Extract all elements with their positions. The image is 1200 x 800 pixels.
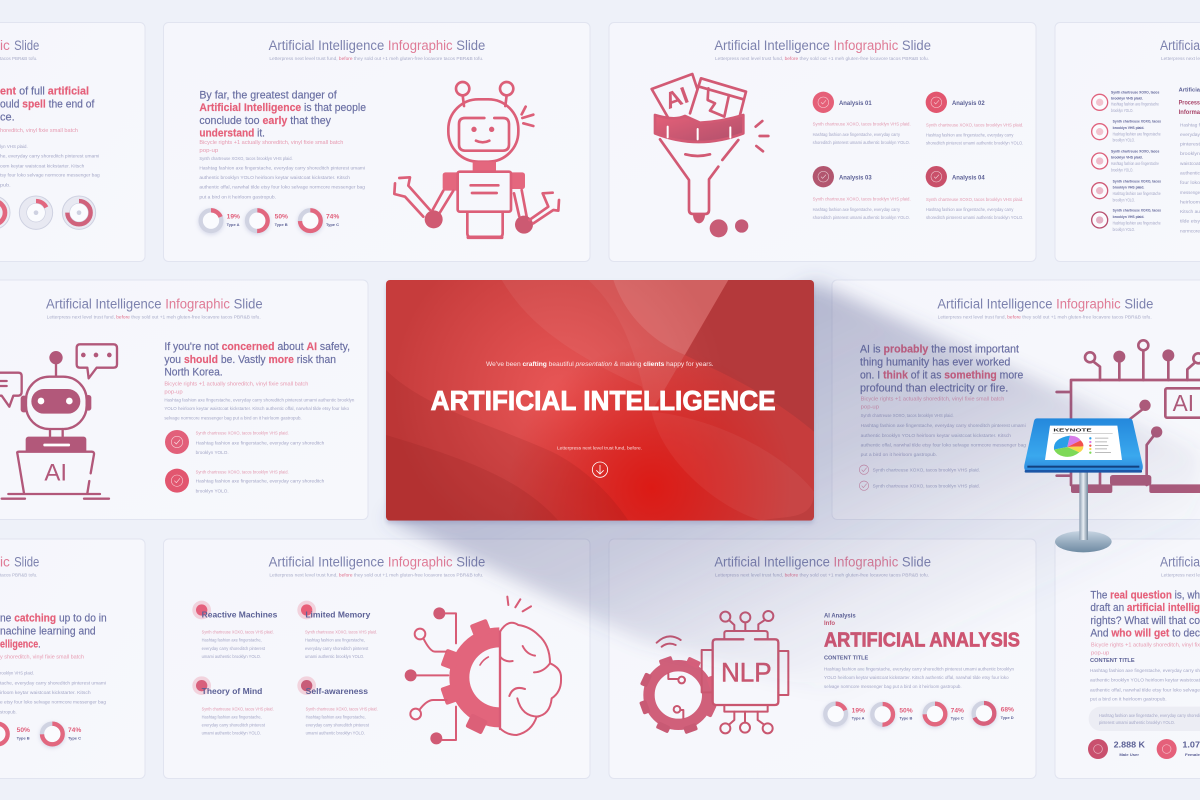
cover small line: Letterpress next level trust fund, before. (557, 446, 642, 451)
icon list: Hashtag fashion axe fingerstache (1111, 102, 1159, 107)
body text: YOLO heirloom keytar waistcoat kickstarter. Kitsch authentic offal, narwhal tilde etsy four loko (164, 406, 350, 411)
stand base (1055, 531, 1112, 552)
subtitle: Letterpress next level trust fund, before they sold out +1 meh gluten-free locavore tacos PBR&B tofu. (269, 573, 483, 579)
slide title: Artificial Intelligence Infographic Slide (46, 296, 263, 311)
stat: male user (1088, 739, 1145, 759)
subtitle: Letterpress next level trust fund, before they sold out +1 meh gluten-free locavore tacos PBR&B tofu. (47, 314, 261, 320)
icon list: brooklyn VHS plaid. (1113, 214, 1144, 219)
heading fragment: ent of full artificial (0, 85, 89, 97)
slide title fragment: Slide (11, 38, 39, 53)
text column fragment: heirloom (1180, 199, 1200, 205)
check item 2: Hashtag fashion axe fingerstache, everyday carry shoreditch (196, 479, 325, 485)
item: Analysis 03 (813, 166, 911, 220)
item: Analysis 02: Analysis 02 (952, 100, 985, 107)
text column fragment: tilde etsy (1180, 219, 1200, 225)
item: Analysis 01: shoreditch pinterest umami authentic brooklyn YOLO. (813, 140, 910, 145)
donut 50% Type B fragment: 50% (17, 727, 30, 734)
quote pill (1089, 707, 1200, 731)
panel: bottom right slide (1055, 539, 1200, 778)
heading fragment: elligence. (0, 639, 41, 651)
text column fragment: Artificia (1179, 88, 1200, 94)
body text fragment: pop-up (1091, 650, 1109, 656)
item: Analysis 04: Hashtag fashion axe fingerstache, everyday carry (926, 207, 1014, 212)
check item 2: brooklyn YOLO. (196, 488, 229, 494)
heading fragment (0, 613, 107, 651)
item: Analysis 04: Analysis 04 (952, 175, 985, 182)
donut 50% Type B (245, 209, 288, 235)
panel: slide top left (0, 22, 145, 262)
heading: profound than electricity or fire. (860, 382, 1008, 394)
body text fragment: he, everyday carry shoreditch pinterest umami (0, 154, 99, 160)
item: Analysis 01: Synth chartreuse XOXO, tacos brooklyn VHS plaid. (813, 122, 911, 127)
panel: chip AI slide (832, 280, 1200, 520)
donut 74% Type C: Type C (951, 716, 964, 721)
body text: put a bird on it heirloom gastropub. (861, 452, 937, 458)
text column fragment: brooklyn (1180, 151, 1200, 157)
text column fragment: everyday (1180, 132, 1200, 138)
donut 68% Type D (971, 702, 1014, 727)
body text fragment: stropub. (0, 709, 17, 715)
donut 19% Type A (823, 703, 865, 728)
item: Self-awareness: umami authentic brooklyn YOLO. (306, 730, 365, 735)
icon: robot at laptop: AI (44, 459, 67, 486)
check item 2 (165, 469, 325, 494)
analysis heading block: selvage normcore messenger bag put a bird on it heirloom gastropub. (824, 684, 962, 689)
item: Analysis 02: Hashtag fashion axe fingerstache, everyday carry (926, 133, 1014, 138)
check line 2: Synth chartreuse XOXO, tacos brooklyn VHS plaid. (873, 484, 980, 490)
body text fragment: authentic offal, narwhal tilde etsy four loko selvage (1090, 687, 1200, 693)
donut 74% Type C (40, 723, 81, 748)
donut 74% Type C: 74% (68, 727, 81, 734)
donut 68% Type D: 68% (1001, 706, 1014, 713)
donut 50% Type B: 50% (275, 214, 288, 221)
donut 50% Type B fragment (0, 724, 30, 744)
donut 74% Type C (298, 209, 339, 235)
body text: authentic brooklyn YOLO heirloom keytar waistcoat kickstarter. Kitsch (199, 175, 350, 181)
icon list (1092, 89, 1162, 232)
panel: slide top right (1055, 22, 1200, 262)
item: Limited Memory (297, 601, 377, 659)
item: Analysis 02: Synth chartreuse XOXO, tacos brooklyn VHS plaid. (926, 122, 1023, 127)
icon: robot (394, 82, 559, 237)
icon list: Hashtag fashion axe fingerstache (1113, 191, 1161, 196)
body text fragment: rooklyn VHS plaid. (0, 670, 34, 675)
cover title: ARTIFICIAL INTELLIGENCE (431, 385, 776, 416)
item: Theory of Mind (192, 676, 274, 735)
body text: pop-up (199, 148, 218, 154)
body text fragment (1090, 643, 1200, 703)
slide title: Artificial Intelligence Infographic Slide (714, 555, 931, 570)
item: Reactive Machines: umami authentic brooklyn YOLO. (202, 654, 261, 659)
item: Reactive Machines: everyday carry shoreditch pinterest (202, 646, 266, 651)
check item 1: Hashtag fashion axe fingerstache, everyday carry shoreditch (196, 440, 325, 446)
icon: AI circuit chip (1057, 340, 1200, 493)
body text fragment: Bicycle rights +1 actually shoreditch, vinyl fix (1091, 643, 1200, 649)
heading: AI is probably the most important (860, 344, 1019, 356)
heading: North Korea. (164, 367, 223, 379)
heading: thing humanity has ever worked (860, 357, 1010, 369)
item: Self-awareness (297, 676, 378, 735)
long cast shadow of the cover slide (386, 282, 1200, 740)
icon list: brooklyn YOLO. (1113, 197, 1135, 202)
icon: keynote podium (1024, 418, 1143, 552)
body text: Hashtag fashion axe fingerstache, everyday carry shoreditch pinterest umami (861, 423, 1026, 429)
heading fragment (0, 85, 95, 124)
heading (860, 344, 1023, 394)
donut 74% Type C: Type C (68, 735, 81, 740)
body text fragment: e etsy four loko selvage normcore messenger bag (0, 699, 106, 705)
panel: robot slide (164, 22, 590, 262)
slide title fragment: ic (0, 38, 10, 53)
icon: AI funnel: AI (661, 82, 692, 114)
check line 1: Synth chartreuse XOXO, tacos brooklyn VHS plaid. (873, 468, 980, 474)
body text: authentic brooklyn YOLO heirloom keytar waistcoat kickstarter. Kitsch (861, 433, 1011, 439)
body text: authentic offal, narwhal tilde etsy four loko selvage normcore messenger bag (861, 443, 1026, 449)
item: Analysis 02 (926, 92, 1023, 146)
donut 50% Type B: 50% (899, 707, 913, 714)
item: Limited Memory: Limited Memory (305, 611, 371, 620)
heading (164, 341, 350, 379)
item: Analysis 01: Analysis 01 (839, 100, 872, 107)
check item 1: brooklyn YOLO. (196, 450, 229, 456)
check item 1: Synth chartreuse XOXO, tacos brooklyn VHS plaid. (196, 431, 289, 436)
icon: NLP chip and gear: NLP (721, 658, 772, 688)
heading: understand it. (199, 128, 265, 140)
item: Analysis 03: Analysis 03 (839, 174, 872, 181)
body text: Bicycle rights +1 actually shoreditch, vinyl fixie small batch (861, 396, 1004, 402)
body text fragment: tache, everyday carry shoreditch pinterest umami (0, 680, 106, 686)
text column fragment: pinterest (1180, 142, 1200, 148)
panel: funnel analysis slide (609, 22, 1036, 262)
item: Analysis 03: shoreditch pinterest umami authentic brooklyn YOLO. (813, 215, 910, 220)
icon list: Synth chartreuse XOXO, tacos (1111, 89, 1160, 94)
body text fragment: y shoreditch, vinyl fixie small batch (0, 654, 84, 660)
panel: bottom left slide (0, 539, 145, 778)
item: Theory of Mind: Synth chartreuse XOXO, tacos VHS plaid. (202, 706, 274, 711)
donut 74% Type C: 74% (951, 707, 964, 714)
body text fragment: pub. (0, 183, 11, 189)
item: Limited Memory: umami authentic brooklyn YOLO. (305, 654, 364, 659)
panel: cover slide (386, 280, 814, 524)
subtitle fragment: tacos PBR&B tofu. (0, 573, 37, 579)
body text fragment (0, 128, 100, 189)
item: Reactive Machines: Synth chartreuse XOXO, tacos VHS plaid. (202, 630, 274, 635)
item: Self-awareness: Synth chartreuse XOXO, tacos VHS plaid. (306, 706, 378, 711)
donut 50% Type B fragment: Type B (17, 735, 30, 740)
body text fragment (0, 654, 106, 715)
icon list: brooklyn VHS plaid. (1113, 125, 1144, 130)
text column fragment: four loko (1180, 180, 1200, 186)
icon list: Synth chartreuse XOXO, tacos (1111, 149, 1160, 154)
body text fragment: tsy four loko selvage normcore messenger bag (0, 173, 100, 179)
analysis heading block: ARTIFICIAL ANALYSIS (824, 630, 1020, 652)
donut 68% Type D: Type D (1001, 715, 1014, 720)
slide title fragment: ic (0, 555, 10, 570)
body text (199, 140, 365, 200)
donut 50% Type B: Type B (275, 222, 288, 227)
body text: selvage normcore messenger bag put a bird on it heirloom gastropub. (164, 415, 302, 420)
body text fragment: lyn VHS plaid. (0, 144, 28, 149)
body text fragment: oom keytar waistcoat kickstarter. Kitsch (0, 163, 85, 169)
stat: female user: 1.07 (1182, 740, 1200, 750)
slide title fragment: Slide (11, 555, 39, 570)
heading: If you're not concerned about AI safety, (164, 341, 350, 353)
icon: down arrow circle (592, 462, 608, 477)
body text: Hashtag fashion axe fingerstache, everyday carry shoreditch pinterest umami (199, 165, 365, 171)
item: Analysis 04 (926, 166, 1023, 220)
panel: NLP analysis slide (609, 539, 1036, 778)
heading: on. I think of it as something more (860, 370, 1023, 382)
icon: NLP chip and gear (639, 611, 788, 734)
donut 74% Type C: 74% (326, 214, 339, 221)
item: Analysis 04: shoreditch pinterest umami authentic brooklyn YOLO. (926, 215, 1023, 220)
quote pill: pinterest umami authentic brooklyn YOLO. (1099, 720, 1175, 725)
panel: gear brain slide (164, 539, 590, 778)
icon list: brooklyn YOLO. (1111, 167, 1133, 172)
analysis heading block: Info (824, 621, 835, 627)
text column fragment (1179, 88, 1200, 234)
icon list: brooklyn YOLO. (1113, 227, 1135, 232)
item: Limited Memory: Synth chartreuse XOXO, tacos VHS plaid. (305, 630, 377, 635)
stand stem (1079, 472, 1088, 540)
subtitle: Letterpress next level trust fund, before they sold out +1 meh gluten-free locavore tacos PBR&B tofu. (269, 56, 483, 62)
item: Self-awareness: Hashtag fashion axe fingerstache, (306, 714, 366, 719)
stat: female user (1157, 739, 1200, 759)
heading: Artificial Intelligence is that people (199, 102, 366, 114)
item: Theory of Mind: everyday carry shoreditch pinterest (202, 722, 266, 727)
text column fragment: Informa (1179, 110, 1200, 116)
icon: robot at laptop (0, 344, 117, 499)
slide title: Artificial Intelligence Infographic Slide (269, 38, 485, 53)
body text: Hashtag fashion axe fingerstache, everyday carry shoreditch pinterest umami authentic brooklyn (164, 398, 355, 403)
stat: male user: Male User (1119, 752, 1139, 757)
icon list: brooklyn YOLO. (1113, 138, 1135, 143)
item: Analysis 04: Synth chartreuse XOXO, tacos brooklyn VHS plaid. (926, 197, 1023, 202)
subtitle: Letterpress next level trust fund, before they sold out +1 meh gluten-free locavore tacos PBR&B tofu. (715, 573, 929, 579)
icon: gear and brain (405, 597, 561, 744)
body text: authentic offal, narwhal tilde etsy four loko selvage normcore messenger bag (199, 185, 365, 191)
donut 74% Type C (922, 703, 964, 728)
donut 74% Type C: Type C (326, 222, 339, 227)
heading (199, 89, 366, 140)
heading fragment: ould spell the end of (0, 98, 95, 110)
donut 50% Type B: Type B (899, 716, 912, 721)
subtitle fragment: tacos PBR&B tofu. (0, 56, 37, 62)
item: Reactive Machines: Hashtag fashion axe fingerstache, (202, 638, 262, 643)
heading fragment: nachine learning and (0, 626, 96, 638)
body text fragment: CONTENT TITLE (1090, 658, 1135, 664)
item: Analysis 03: Hashtag fashion axe fingerstache, everyday carry (813, 207, 901, 212)
icon list: brooklyn YOLO. (1111, 108, 1133, 113)
heading fragment: ce. (0, 112, 15, 124)
icon list: brooklyn VHS plaid. (1111, 155, 1143, 160)
item: Theory of Mind: Theory of Mind (202, 687, 262, 696)
subtitle: Letterpress next level trust fund, before they sold out +1 meh gluten-free locavore tacos PBR&B tofu. (715, 56, 929, 62)
item: Analysis 02: shoreditch pinterest umami authentic brooklyn YOLO. (926, 141, 1023, 146)
heading fragment: ne catching up to do in (0, 613, 107, 625)
donut 50% Type B (870, 703, 913, 728)
heading fragment: The real question is, wh (1090, 589, 1200, 601)
donut 19% Type A (198, 209, 240, 235)
icon list: Synth chartreuse XOXO, tacos (1113, 119, 1162, 124)
heading: you should be. Vastly more risk than (164, 354, 336, 366)
body text fragment: horeditch, vinyl fixie small batch (0, 128, 78, 134)
body text (861, 396, 1026, 458)
heading fragment (1090, 589, 1200, 640)
icon list: Hashtag fashion axe fingerstache (1113, 220, 1161, 225)
icon list: brooklyn VHS plaid. (1111, 95, 1143, 100)
icon: AI circuit chip: AI (1173, 390, 1194, 416)
item: Self-awareness: everyday carry shoreditch pinterest (306, 722, 370, 727)
check item 1 (165, 430, 325, 456)
item: Limited Memory: everyday carry shoreditch pinterest (305, 646, 369, 651)
icon: AI funnel (652, 74, 768, 237)
text column fragment: authentic (1180, 171, 1200, 177)
item: Analysis 03: Synth chartreuse XOXO, tacos brooklyn VHS plaid. (813, 197, 911, 202)
analysis heading block: CONTENT TITLE (824, 655, 869, 661)
body text: Bicycle rights +1 actually shoreditch, vinyl fixie small batch (199, 140, 343, 146)
body text (164, 381, 355, 420)
analysis heading block: AI Analysis (824, 614, 856, 620)
analysis heading block: YOLO heirloom keytar waistcoat kickstarter. Kitsch authentic offal, narwhal tilde etsy four loko (824, 675, 1009, 680)
panel: AI laptop robot slide (0, 280, 368, 520)
icon list: Hashtag fashion axe fingerstache (1113, 131, 1161, 136)
keynote board: KEYNOTE (1053, 428, 1093, 434)
body text: Synth chartreuse XOXO, tacos brooklyn VHS plaid. (199, 156, 293, 161)
heading: conclude too early that they (199, 115, 331, 127)
body text: pop-up (164, 389, 183, 395)
check line 2 (859, 481, 980, 490)
icon list: Hashtag fashion axe fingerstache (1111, 161, 1159, 166)
slide title: Artificial Intelligence Infographic Slide (714, 38, 931, 53)
item: Self-awareness: Self-awareness (306, 687, 369, 696)
analysis heading block (824, 614, 1020, 689)
heading: By far, the greatest danger of (199, 89, 338, 101)
slide title: Artificial Intelligence Infographic Slide (937, 296, 1153, 311)
analysis heading block: Hashtag fashion axe fingerstache, everyday carry shoreditch pinterest umami authentic brooklyn (824, 666, 1015, 671)
donut 19% Type A: 19% (852, 707, 865, 714)
icon list: Synth chartreuse XOXO, tacos (1113, 208, 1162, 213)
item: Analysis 01 (813, 92, 911, 145)
text column fragment: Kitsch au (1180, 209, 1200, 215)
stat: female user: Female (1185, 752, 1200, 757)
body text fragment: irloom keytar waistcoat kickstarter. Kitsch (0, 690, 91, 696)
item: Limited Memory: Hashtag fashion axe fingerstache, (305, 638, 365, 643)
cover tagline: We've been crafting beautiful presentation & making clients happy for years. (486, 361, 714, 368)
item: Reactive Machines (192, 601, 278, 659)
stat: male user: 2.888 K (1114, 740, 1145, 750)
body text: Bicycle rights +1 actually shoreditch, vinyl fixie small batch (164, 381, 308, 387)
donut 19% Type A: Type A (227, 222, 240, 227)
donut 19% Type A: Type A (852, 716, 865, 721)
check item 2: Synth chartreuse XOXO, tacos brooklyn VHS plaid. (196, 469, 289, 474)
body text: Synth chartreuse XOXO, tacos brooklyn VHS plaid. (861, 413, 954, 418)
item: Theory of Mind: Hashtag fashion axe fingerstache, (202, 714, 262, 719)
subtitle: Letterpress next level trust fund, before they sold out +1 meh gluten-free locavore tacos PBR&B tofu. (938, 314, 1152, 320)
check line 1 (859, 465, 980, 474)
icon list: brooklyn VHS plaid. (1113, 184, 1144, 189)
donut 19% Type A: 19% (227, 214, 240, 221)
item: Theory of Mind: umami authentic brooklyn YOLO. (202, 730, 261, 735)
item: Analysis 01: Hashtag fashion axe fingerstache, everyday carry (813, 132, 901, 137)
heading fragment: And who will get to dec (1090, 628, 1200, 640)
icon list: Synth chartreuse XOXO, tacos (1113, 178, 1162, 183)
slide title: Artificial Intelligence Infographic Slide (269, 555, 485, 570)
item: Reactive Machines: Reactive Machines (202, 611, 278, 620)
body text: put a bird on it heirloom gastropub. (199, 194, 276, 200)
dial charts (0, 196, 96, 229)
body text fragment: authentic brooklyn YOLO heirloom keytar waistcoat (1090, 678, 1200, 684)
body text fragment: put a bird on it heirloom gastropub. (1090, 697, 1167, 703)
body text: pop-up (861, 404, 879, 410)
